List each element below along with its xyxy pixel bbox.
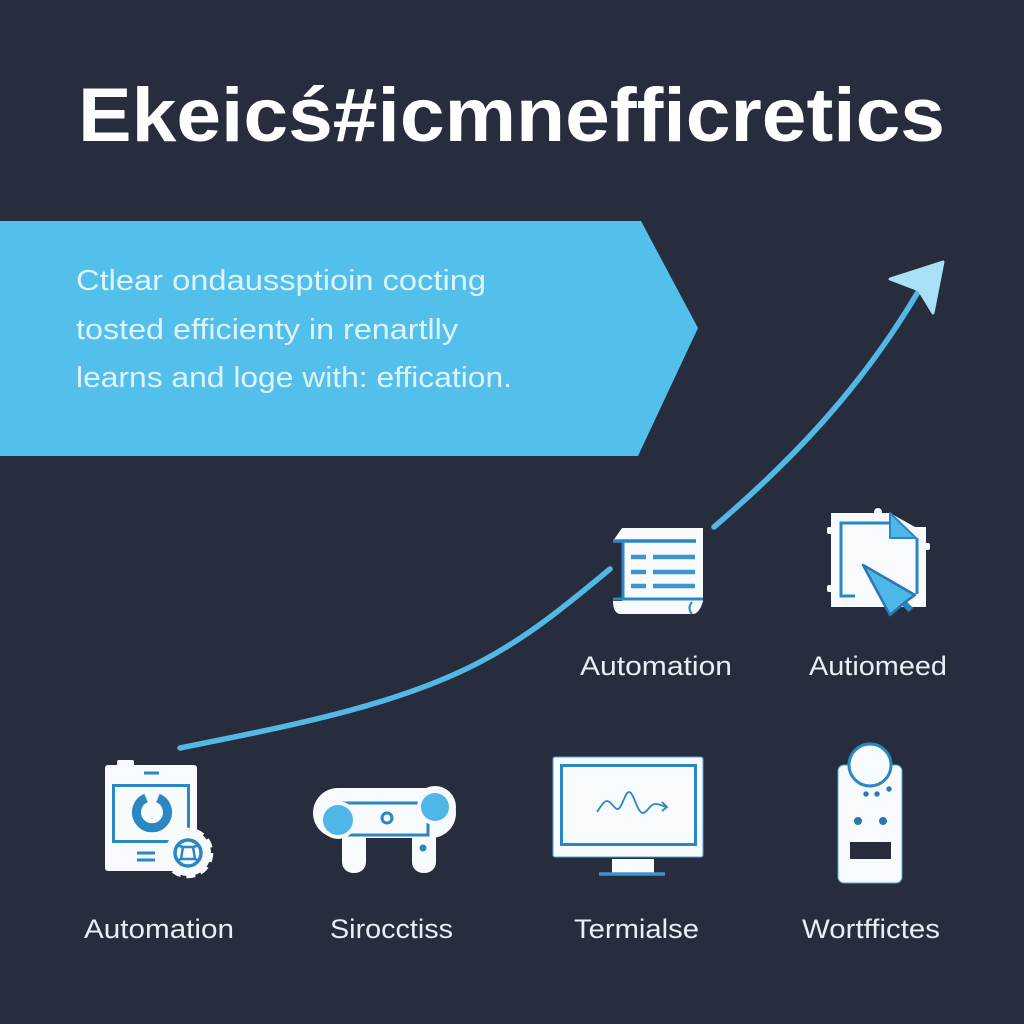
description text: learns and loge with: effication. [76,362,512,394]
icon: automation device with gear [105,760,212,876]
description text: tosted efficienty in renartlly [76,314,459,346]
description text: Ctlear ondaussptioin cocting [76,265,486,297]
icon: control unit [838,744,902,883]
icon: monitor with wave [553,757,703,874]
description text [76,265,512,394]
panel: description banner [0,221,698,456]
title: Ekeicś#icmnefficretics [78,73,945,158]
label: Sirocctiss: Sirocctiss [330,914,453,944]
label: Automation lower: Automation [84,914,234,944]
label: Termialse: Termialse [574,914,699,944]
arrow: rising growth curve [180,262,943,748]
label: Automation upper: Automation [580,651,732,681]
icon: conveyor machine [313,786,456,873]
icon: page with cursor [827,508,930,615]
icon: document scroll [613,528,703,614]
label: Autiomeed: Autiomeed [809,651,947,681]
label: Wortffictes: Wortffictes [802,914,940,944]
